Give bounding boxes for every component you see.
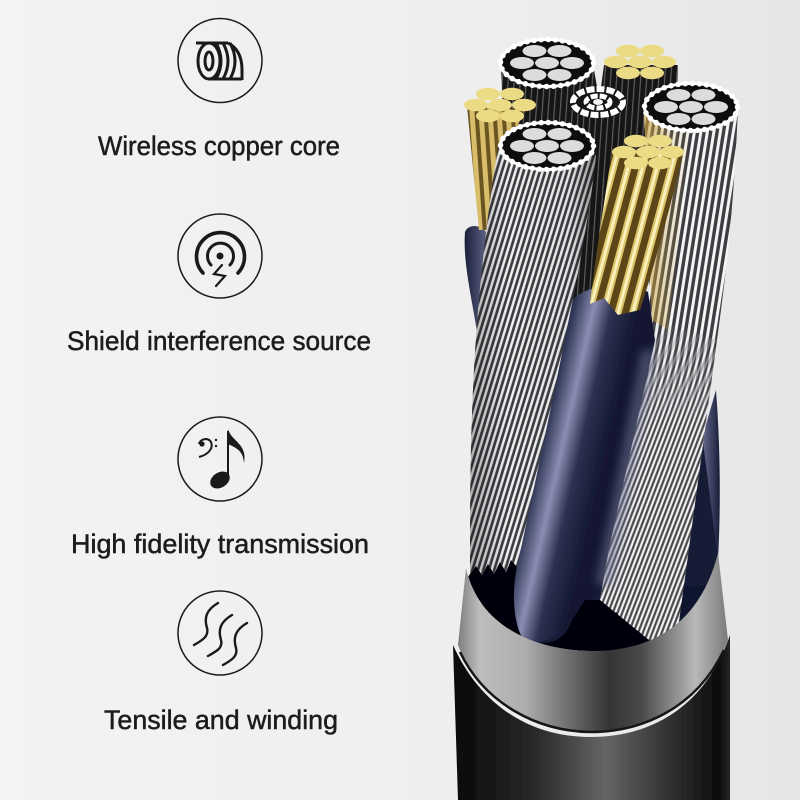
label: high fidelity transmission: High fidelity transmission — [71, 529, 369, 559]
jacket — [453, 635, 730, 800]
ring lip — [460, 650, 724, 732]
label: shield interference source: Shield interference source — [67, 326, 371, 356]
strand: centre blue insulation — [509, 285, 655, 642]
cable interior fill — [500, 340, 718, 650]
metal ring — [458, 553, 728, 731]
strand: right insulation — [680, 390, 720, 590]
strand: right silver — [600, 108, 738, 645]
strand: front-left silver — [470, 148, 596, 575]
back strand bodies — [501, 65, 678, 400]
right opening navy — [677, 565, 718, 637]
cable illustration — [453, 40, 738, 800]
icon: shield interference — [178, 214, 262, 298]
label: wireless copper core: Wireless copper core — [98, 131, 340, 161]
strand end faces — [500, 40, 738, 170]
icon: music notes — [178, 417, 262, 501]
strand: front gold wire — [590, 150, 684, 315]
icon: copper coil — [178, 18, 262, 102]
strand: back-left gold wire — [464, 88, 536, 230]
cable opening shadow — [466, 560, 655, 651]
label: tensile and winding: Tensile and winding — [104, 705, 338, 735]
soft sheen between blue strand and silver — [596, 350, 656, 585]
icon: tensile waves — [178, 591, 262, 675]
strand: back-left insulation — [465, 226, 510, 370]
